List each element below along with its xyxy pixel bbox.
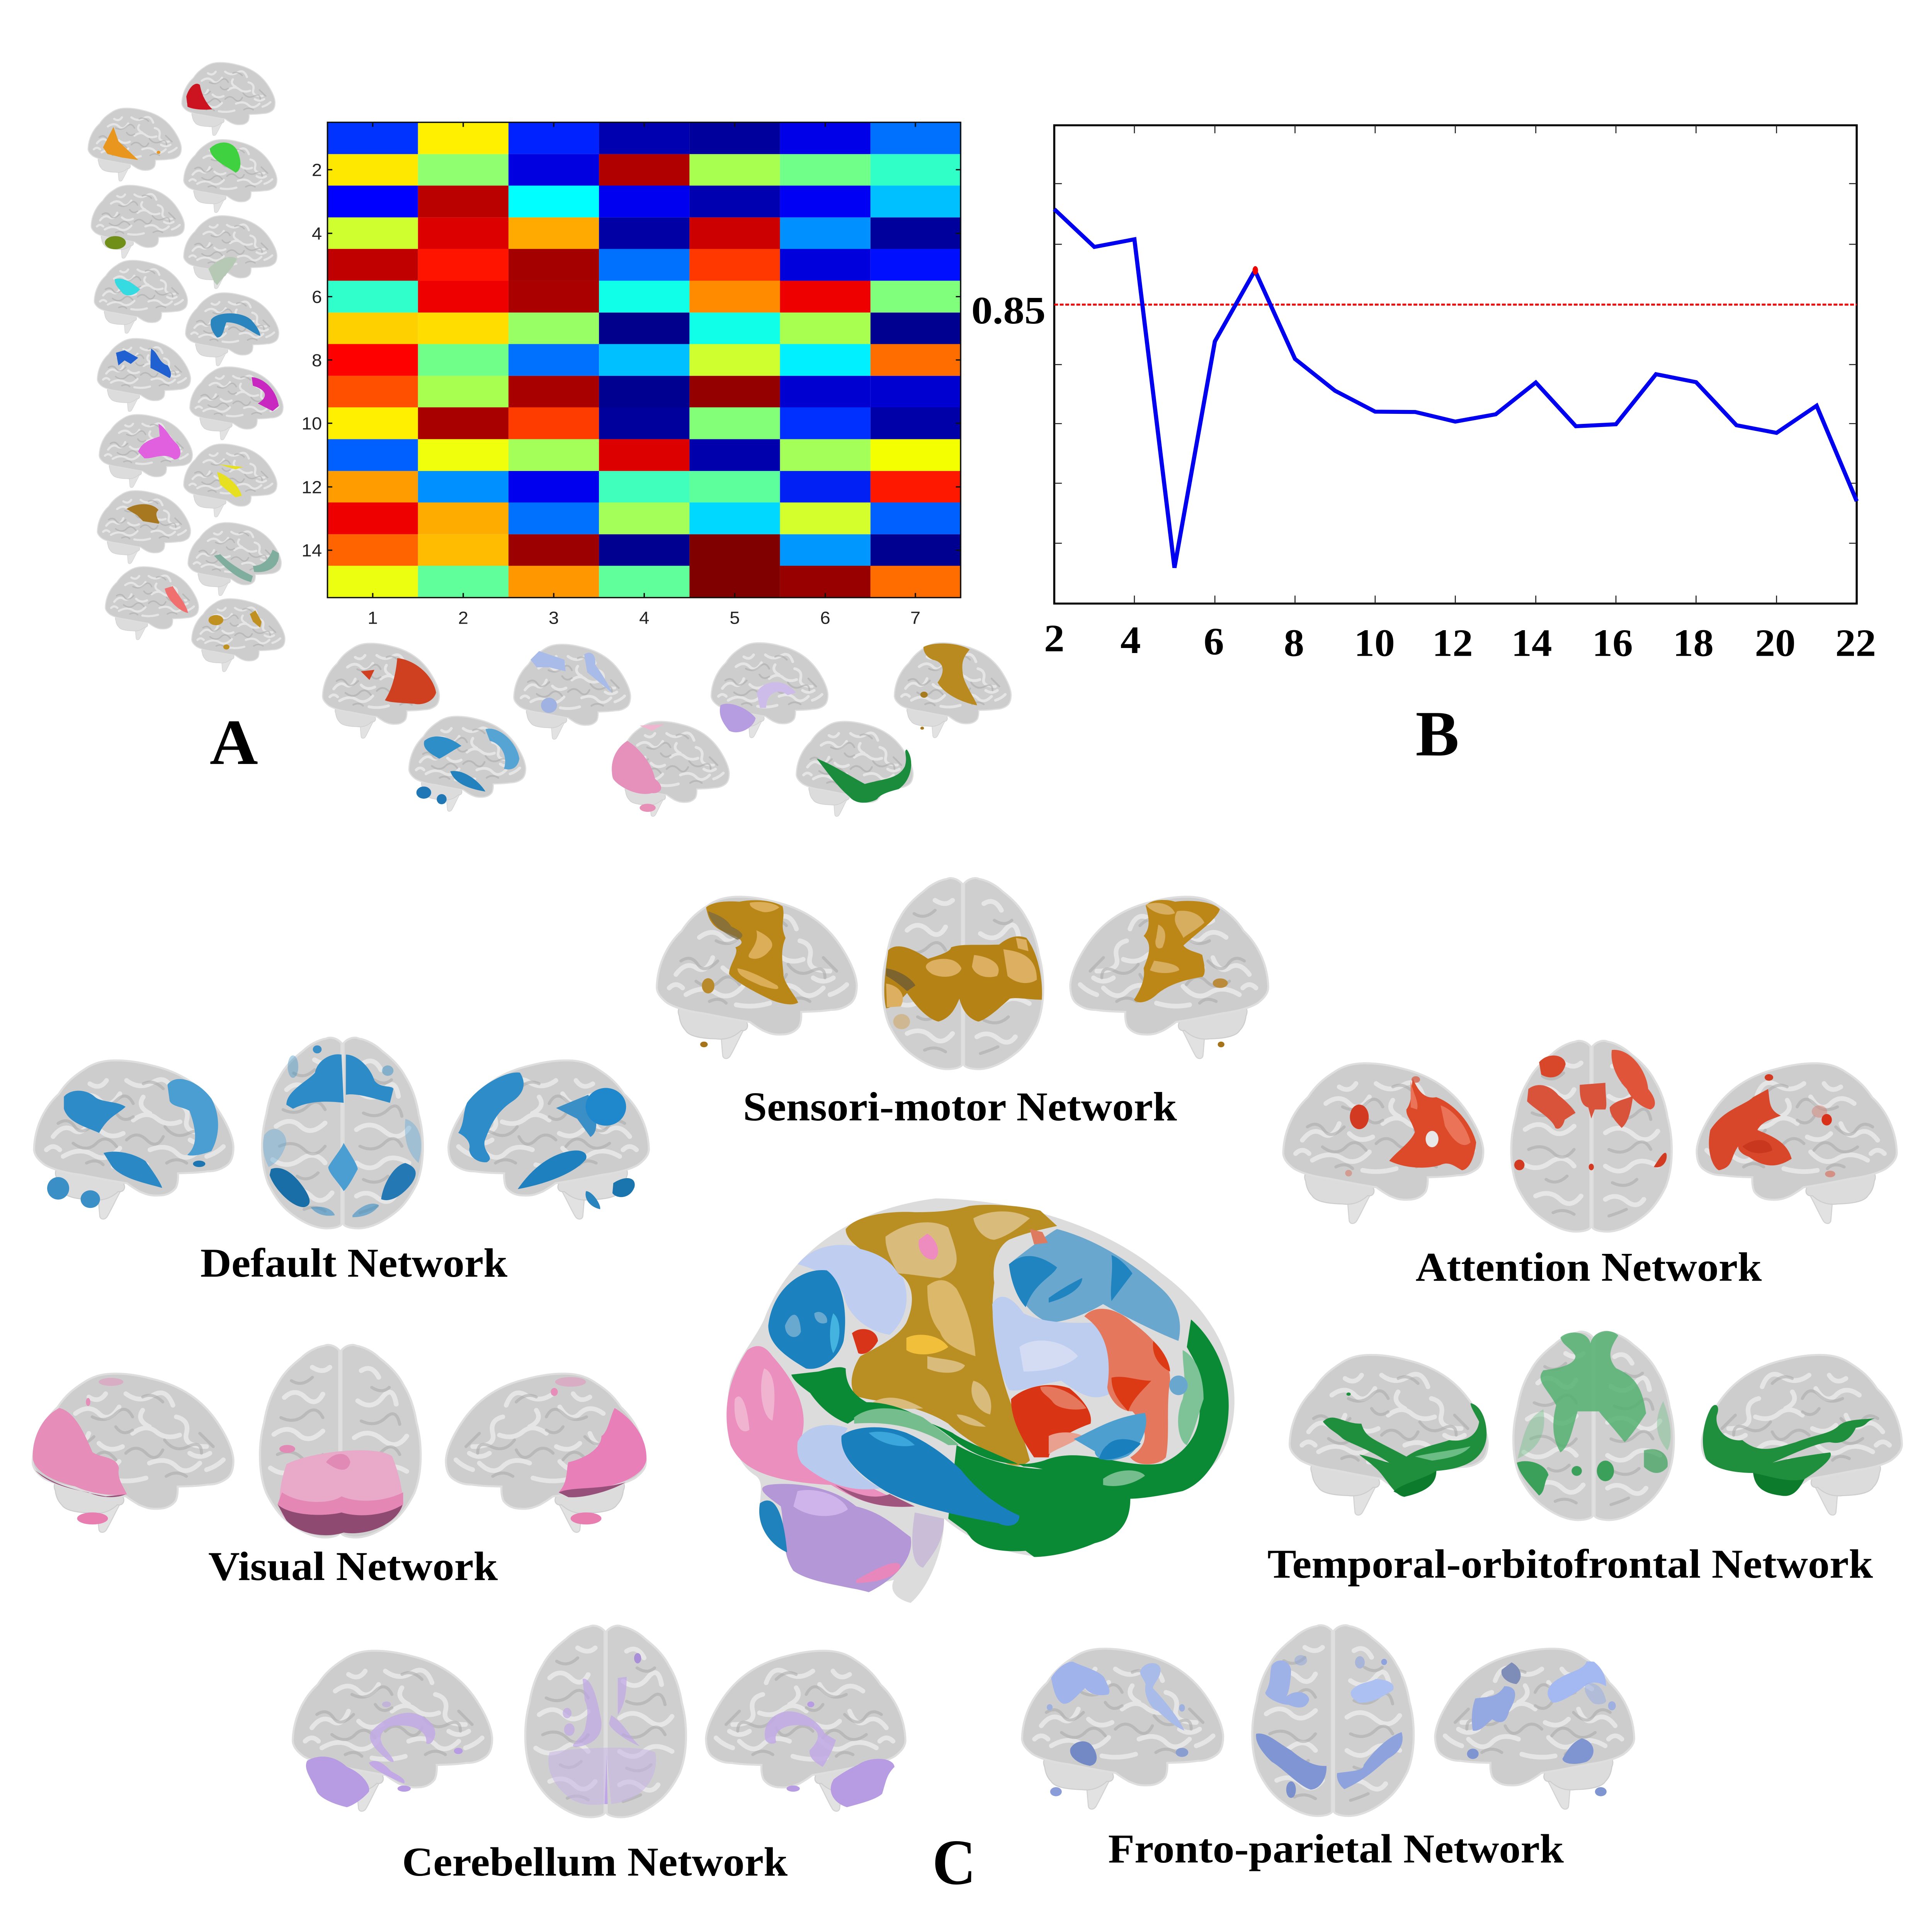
temporal-orbitofrontal network views xyxy=(1290,1331,1902,1520)
fronto-parietal label: Fronto-parietal Network xyxy=(1108,1826,1564,1871)
attention network views xyxy=(1283,1041,1897,1231)
brain: magenta component xyxy=(190,367,283,440)
heat map axis labels: 4 xyxy=(639,608,649,628)
brain: visual network xyxy=(612,721,729,816)
threshold label: 0.85 xyxy=(971,289,1046,332)
heat map axis labels: 12 xyxy=(301,477,322,497)
panel B: line chart xyxy=(971,125,1876,769)
chart x axis labels: 16 xyxy=(1592,621,1633,665)
brain: red component xyxy=(182,63,275,136)
sensori-motor label: Sensori-motor Network xyxy=(743,1084,1177,1129)
attention small node xyxy=(852,1329,878,1354)
fronto-parietal central region xyxy=(992,1297,1112,1397)
heat map axis labels: 2 xyxy=(458,608,468,628)
panel letter A: A xyxy=(210,706,258,778)
threshold line at 0.85 xyxy=(1054,303,1857,306)
brain: orchid component xyxy=(99,415,192,488)
sensori-motor network views xyxy=(657,878,1268,1069)
small component brains, left columns xyxy=(88,63,285,672)
brain: royal blue component xyxy=(97,338,190,412)
panel letter B: B xyxy=(1416,698,1459,769)
brain: amber component xyxy=(192,599,285,672)
cerebellum region xyxy=(762,1484,911,1592)
chart x axis labels: 14 xyxy=(1511,621,1552,665)
visual region xyxy=(726,1346,915,1507)
chart frame and ticks xyxy=(1054,125,1857,604)
brain: green component xyxy=(184,139,277,213)
brain: sage component xyxy=(188,522,281,596)
visual network views xyxy=(33,1345,646,1537)
chart x axis labels: 18 xyxy=(1673,621,1714,665)
brain: fronto-parietal network xyxy=(514,645,631,739)
default network label: Default Network xyxy=(201,1240,508,1286)
default lower temporal xyxy=(841,1427,1019,1526)
temporal-orbitofrontal label: Temporal-orbitofrontal Network xyxy=(1267,1541,1873,1587)
fronto-parietal network views xyxy=(1022,1625,1634,1816)
brain: grey-green component xyxy=(184,216,277,289)
brain: orange component xyxy=(88,108,181,181)
brain: brown component xyxy=(97,491,190,564)
chart x axis labels: 12 xyxy=(1432,621,1473,665)
heat map axis labels: 8 xyxy=(312,350,322,370)
blue curve xyxy=(1054,209,1857,568)
heat map axis labels: 2 xyxy=(312,160,322,180)
chart x axis labels: 22 xyxy=(1835,621,1876,665)
heat map: 15 by 7 component matrix xyxy=(327,122,961,598)
heat map axis labels: 5 xyxy=(730,608,740,628)
temporal-orbitofrontal region xyxy=(791,1320,1229,1557)
chart x axis labels: 6 xyxy=(1204,620,1224,663)
chart x axis labels: 10 xyxy=(1354,621,1395,665)
bottom row network brains xyxy=(323,643,1011,816)
default parietal lobe xyxy=(768,1270,845,1369)
default frontal region xyxy=(1009,1229,1180,1341)
cerebellum network views xyxy=(293,1626,905,1817)
translucent cortex shell xyxy=(728,1198,1235,1603)
brain: temporal-orbitofrontal network xyxy=(796,721,913,816)
brain: sensori-motor network xyxy=(895,643,1011,738)
heat map axis labels: 4 xyxy=(312,224,322,243)
sensori-motor region xyxy=(846,1205,1057,1466)
panel letter C: C xyxy=(932,1827,976,1898)
chart x axis labels: 20 xyxy=(1755,621,1796,665)
heat map axis labels xyxy=(301,160,920,628)
chart x axis labels: 8 xyxy=(1284,621,1304,665)
brain: cyan component xyxy=(94,260,187,333)
heat map axis labels: 10 xyxy=(301,414,322,433)
attention network label: Attention Network xyxy=(1416,1244,1762,1290)
brain: default network xyxy=(409,716,526,811)
central overlay brain with all networks xyxy=(726,1198,1235,1603)
chart x axis labels xyxy=(1044,617,1876,665)
brain: attention network xyxy=(323,643,439,738)
panel A: components and heat map xyxy=(88,63,1011,816)
heat map axis labels: 14 xyxy=(301,541,322,560)
heat map axis labels: 7 xyxy=(910,608,920,628)
attention frontal region xyxy=(1084,1309,1170,1464)
heat map axis labels: 6 xyxy=(820,608,830,628)
heat map axis labels: 6 xyxy=(312,287,322,307)
brain: yellow component xyxy=(184,444,277,517)
brain: steel blue component xyxy=(185,293,279,366)
brain: olive component xyxy=(91,185,184,259)
fronto-parietal left lobes xyxy=(798,1245,906,1335)
panel C: networks xyxy=(33,878,1902,1898)
chart x axis labels: 4 xyxy=(1121,619,1141,662)
visual network label: Visual Network xyxy=(208,1544,498,1589)
default network views xyxy=(34,1038,649,1228)
chart x axis labels: 2 xyxy=(1044,617,1065,660)
cerebellum network label: Cerebellum Network xyxy=(402,1839,788,1885)
brain: cerebellum network xyxy=(711,643,828,738)
red marker at k=7 xyxy=(1253,266,1258,275)
heat map axis labels: 1 xyxy=(367,608,378,628)
heat map axis labels: 3 xyxy=(549,608,559,628)
brain: salmon component xyxy=(105,567,199,640)
